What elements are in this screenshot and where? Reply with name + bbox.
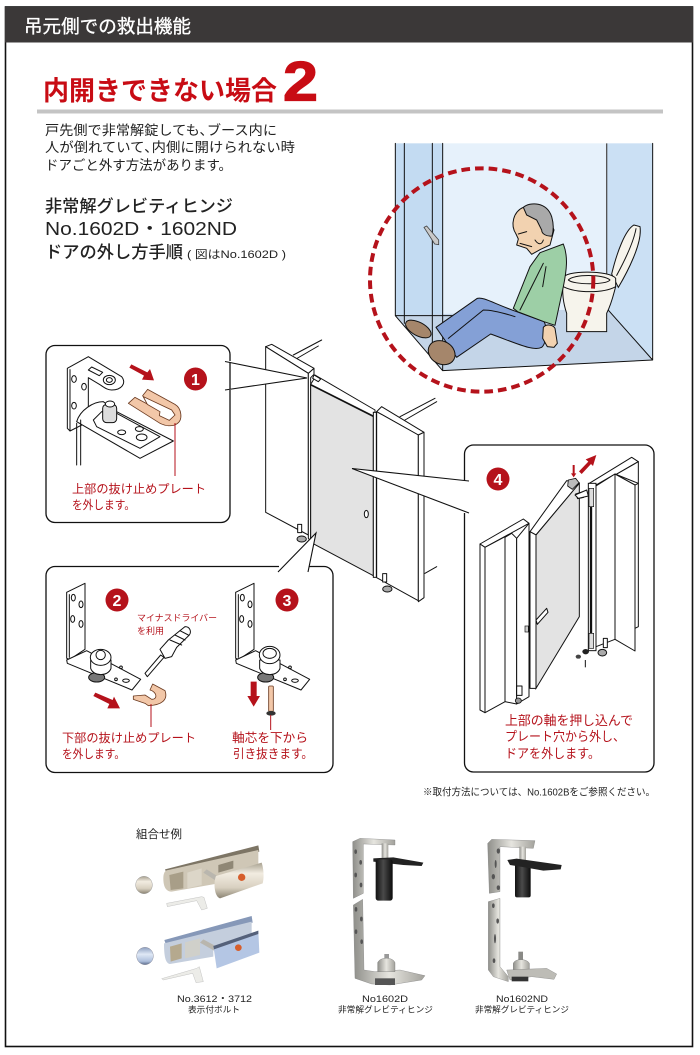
dashed circle bbox=[370, 168, 593, 392]
tool note: を利用 bbox=[137, 625, 164, 636]
product heading: 非常解グレビティヒンジ bbox=[45, 197, 233, 216]
caption bbox=[72, 482, 206, 512]
caption: ドアを外します。 bbox=[505, 746, 600, 761]
header bar bbox=[5, 7, 693, 42]
caption step 2 bbox=[62, 731, 196, 761]
step number 4 bbox=[486, 468, 510, 490]
product caption: 1602ND: 非常解グレビティヒンジ bbox=[475, 1004, 569, 1014]
title: 2 bbox=[283, 50, 318, 112]
intro text: 人が倒れていて､内側に開けられない時 bbox=[45, 140, 295, 155]
product caption: 1602D: 非常解グレビティヒンジ bbox=[338, 1004, 433, 1014]
hinge top detail bbox=[67, 357, 173, 465]
callout pointer to bottom hinge bbox=[278, 533, 316, 572]
illustration: collapsed person in booth bbox=[370, 143, 653, 392]
step number 2 bbox=[106, 588, 128, 612]
panel: step 4 bbox=[352, 445, 654, 772]
step number 2: 2 bbox=[113, 593, 122, 610]
hinge bracket step 2 bbox=[67, 583, 141, 690]
caption: プレート穴から外し、 bbox=[505, 729, 625, 744]
product heading: No.1602D・1602ND bbox=[45, 219, 237, 239]
removed door assembly bbox=[480, 455, 596, 713]
product photo: hinge 1602D bbox=[353, 838, 425, 985]
product caption: bolts: No.3612・3712 bbox=[177, 994, 252, 1005]
product caption: 1602D bbox=[338, 994, 433, 1014]
arrow bbox=[93, 693, 120, 708]
product caption: 1602ND: No1602ND bbox=[496, 994, 548, 1005]
callout pointer to top hinge bbox=[225, 361, 307, 390]
left frame bbox=[480, 519, 529, 713]
intro text: 戸先側で非常解錠しても､ブース内に bbox=[45, 122, 277, 138]
product heading: ドアの外し方手順 bbox=[45, 243, 183, 262]
booth walls and floor bbox=[395, 143, 653, 371]
gold bolt set bbox=[136, 845, 264, 910]
title: 内開きできない場合 bbox=[43, 76, 277, 106]
step number 1 bbox=[184, 368, 207, 390]
door callout pointer bbox=[352, 468, 470, 513]
product caption: bolts: 表示付ボルト bbox=[188, 1004, 240, 1014]
product heading: ( 図はNo.1602D ) bbox=[187, 248, 286, 261]
screwdriver bbox=[145, 627, 190, 677]
arrow bbox=[129, 364, 154, 380]
right frame bbox=[575, 457, 638, 667]
intro text bbox=[45, 122, 295, 173]
red arrows bbox=[571, 465, 576, 477]
down arrow and pin bbox=[247, 682, 276, 730]
caption: 上部の抜け止めプレート bbox=[72, 482, 206, 496]
silver bolt set bbox=[137, 916, 259, 983]
product photos: indicator bolts bbox=[136, 845, 264, 983]
removed lower plate bbox=[133, 684, 166, 706]
product photo: hinge 1602ND bbox=[488, 839, 562, 982]
step number 3: 3 bbox=[283, 593, 292, 610]
product heading bbox=[45, 197, 286, 262]
footnote: ※取付方法については、No.1602Bをご参照ください。 bbox=[423, 786, 655, 798]
product caption: 1602D: No1602D bbox=[362, 994, 408, 1005]
step number 1: 1 bbox=[191, 372, 200, 389]
leader line bbox=[174, 423, 176, 476]
caption step 3: 軸芯を下から bbox=[232, 731, 308, 745]
caption step 2: を外します。 bbox=[62, 747, 125, 761]
title rule bbox=[37, 110, 663, 114]
step number 3 bbox=[276, 588, 298, 612]
intro text: ドアごと外す方法があります。 bbox=[45, 158, 232, 173]
tool note bbox=[137, 613, 217, 636]
title bbox=[43, 50, 318, 112]
tool note: マイナスドライバー bbox=[137, 613, 217, 623]
panel: steps 2 and 3 bbox=[46, 533, 333, 772]
combination heading: 組合せ例 bbox=[136, 827, 182, 841]
illustration: central door bbox=[266, 340, 437, 602]
leader line bbox=[150, 704, 152, 727]
person bbox=[403, 204, 566, 369]
caption: 上部の軸を押し込んで bbox=[505, 713, 633, 728]
toilet bbox=[563, 225, 640, 332]
panel: step 1 bbox=[46, 346, 307, 522]
product caption: 1602ND bbox=[475, 994, 569, 1014]
caption step 3 bbox=[232, 731, 313, 761]
door leaf bbox=[530, 478, 584, 688]
product caption: bolts bbox=[177, 994, 252, 1014]
removed stop plate bbox=[128, 389, 181, 426]
caption: を外します。 bbox=[72, 498, 135, 512]
caption bbox=[505, 713, 633, 761]
caption step 3: 引き抜きます。 bbox=[233, 746, 313, 761]
step number 4: 4 bbox=[494, 472, 503, 489]
hinge bracket step 3 bbox=[236, 583, 310, 690]
hinge feet bbox=[297, 524, 392, 592]
header bar: 吊元側での救出機能 bbox=[24, 16, 191, 37]
caption step 2: 下部の抜け止めプレート bbox=[62, 731, 196, 745]
